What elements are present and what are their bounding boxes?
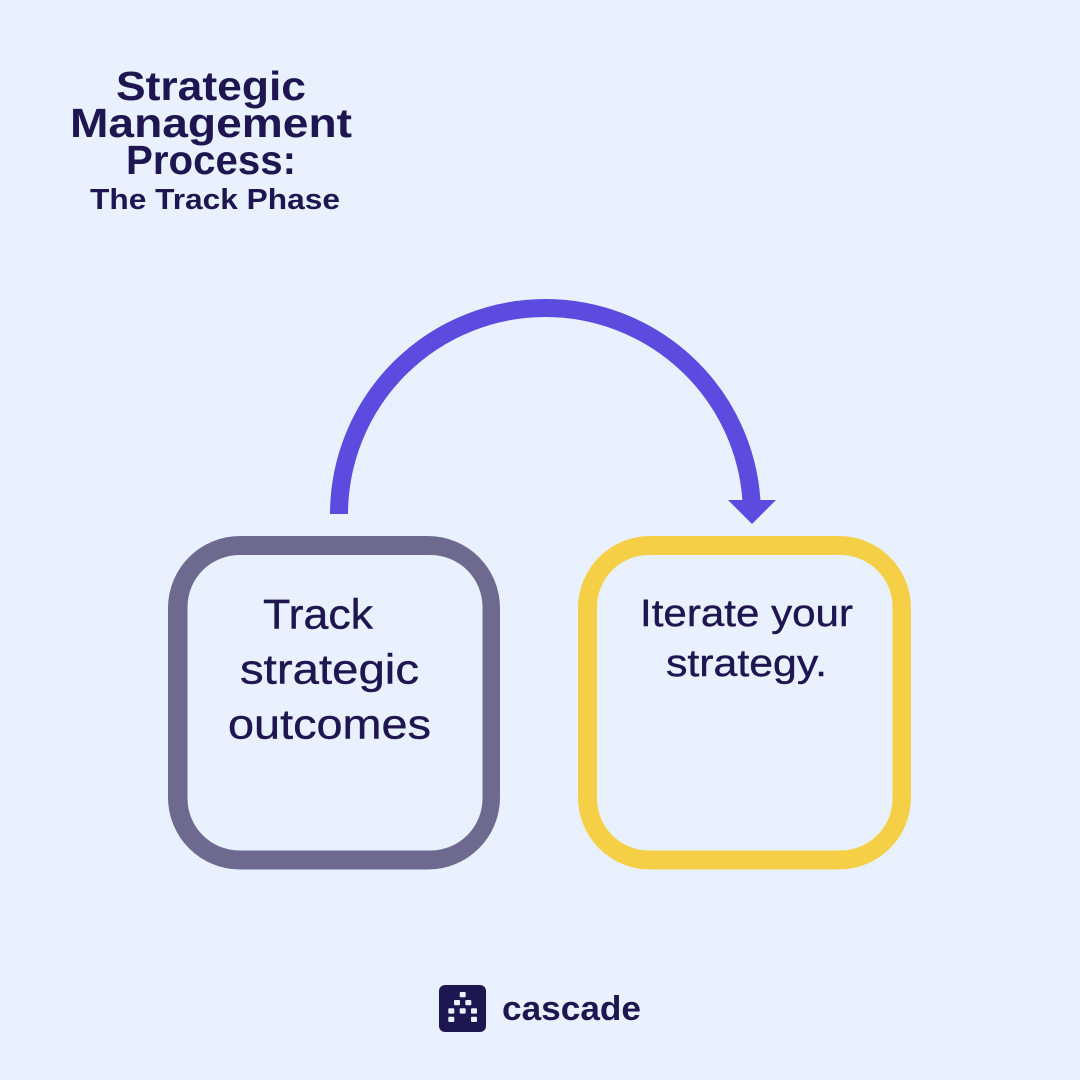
panel: track strategic outcomes: outcomes [228, 700, 431, 748]
panel: iterate your strategy: strategy. [666, 643, 827, 685]
panel: track strategic outcomes: strategic [240, 646, 419, 692]
title: The Track Phase [90, 184, 340, 216]
title: Strategic [116, 63, 306, 109]
panel: iterate your strategy: Iterate your [640, 593, 853, 635]
title: Process: [126, 137, 296, 183]
panel: iterate your strategy [578, 536, 911, 870]
curved arrow [339, 308, 776, 524]
title [70, 63, 352, 216]
wordmark: cascade [502, 990, 641, 1028]
cascade logo [439, 985, 641, 1032]
icon: cascade mark [439, 985, 486, 1032]
title: Management [70, 100, 352, 146]
panel: track strategic outcomes: Track [263, 590, 374, 638]
panel: track strategic outcomes [168, 536, 500, 870]
